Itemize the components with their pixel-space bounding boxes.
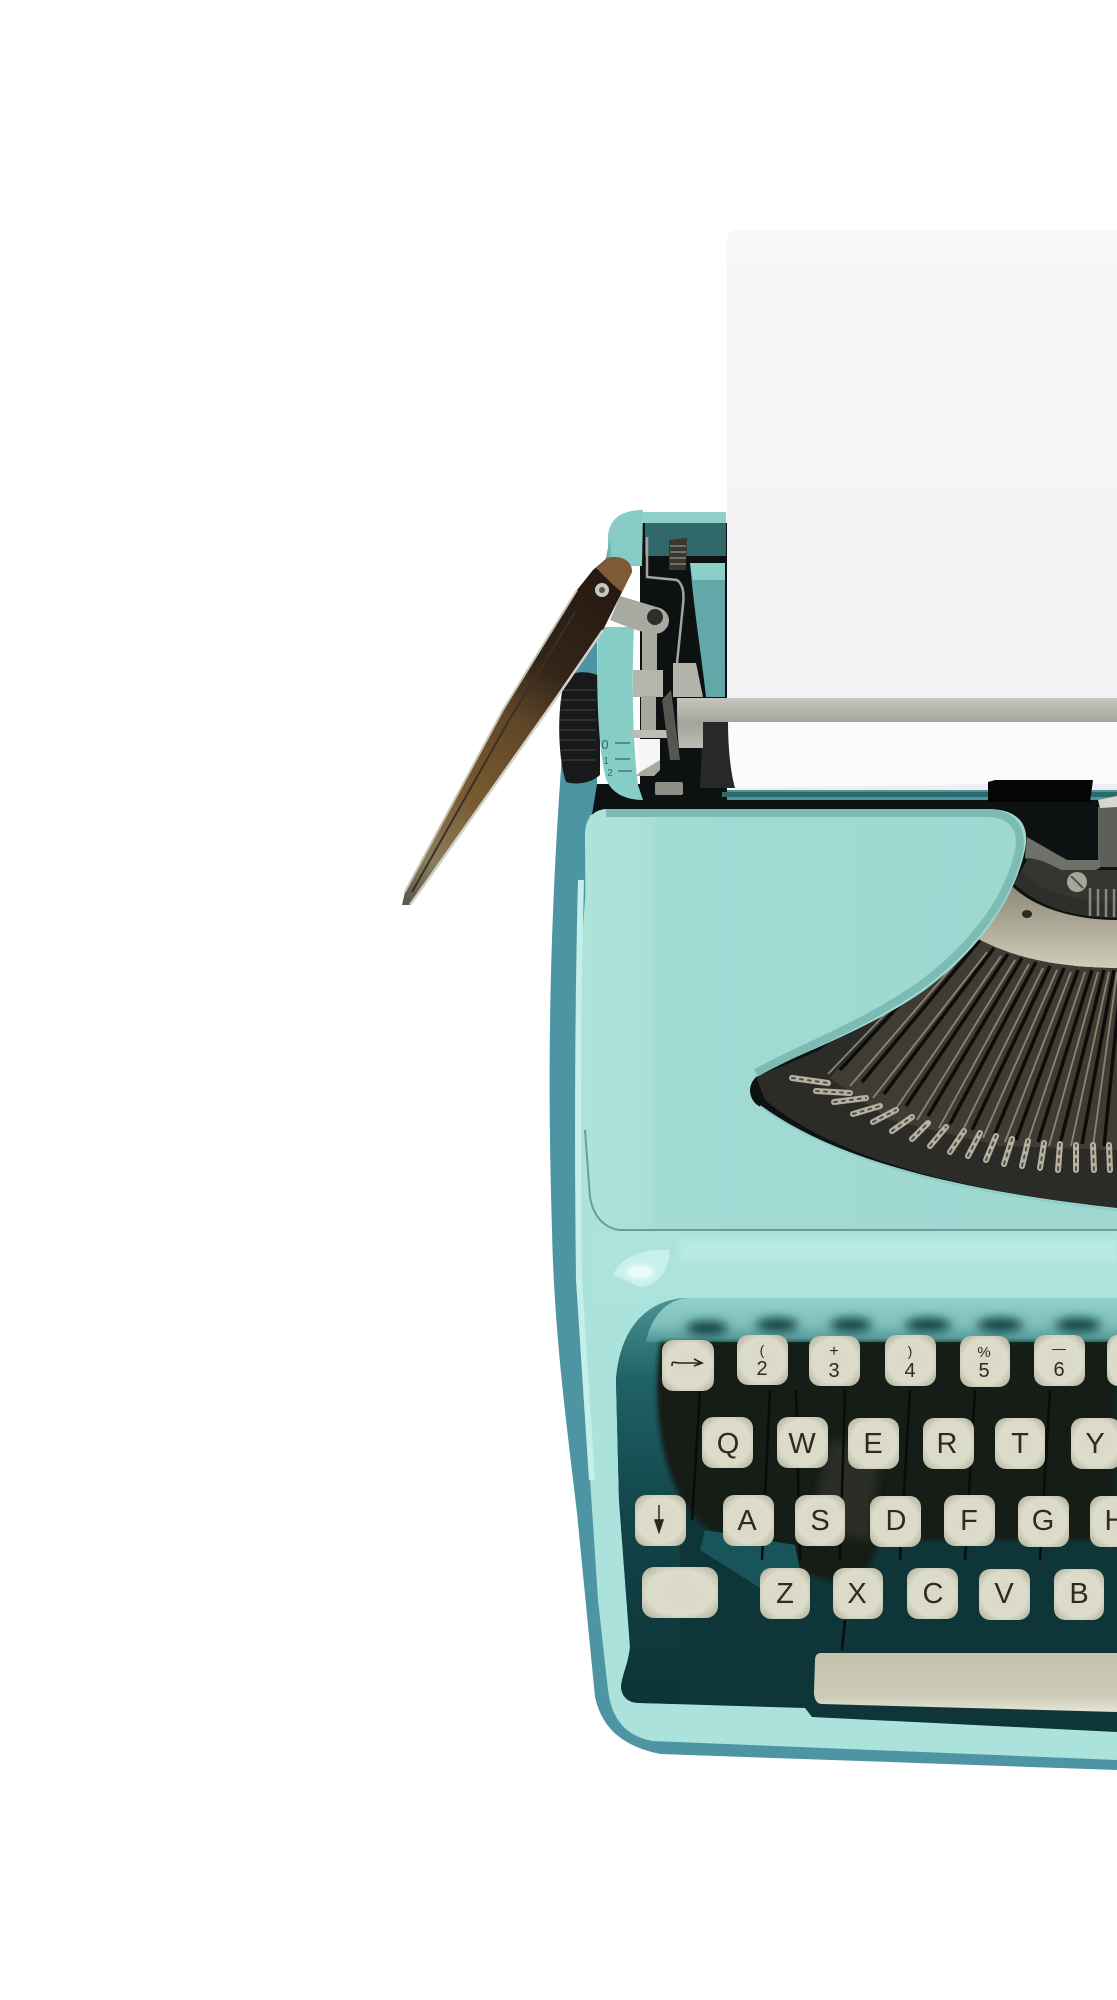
keyboard well [616, 1298, 1117, 1732]
keys: QWERTY row: Q [717, 1428, 739, 1460]
keys: ZXCV row: C [923, 1578, 943, 1610]
rubber type basket [756, 930, 1117, 1208]
keys: ASDF row: F [960, 1505, 978, 1537]
keys: ZXCV row: V [994, 1578, 1014, 1610]
keys: QWERTY row [702, 1417, 1117, 1469]
paper lower section [727, 722, 1117, 788]
line spacing dial numbers: 0 [601, 737, 609, 752]
carriage mechanism [632, 537, 703, 795]
type basket ring [963, 887, 1117, 968]
keys: QWERTY row: R [937, 1428, 957, 1460]
keys: QWERTY row: T [1011, 1428, 1029, 1460]
keys: number row: % [977, 1344, 991, 1361]
keys: number row: 2 [756, 1358, 768, 1380]
dark interior behind the cover [592, 523, 1117, 1210]
keys: number row: 3 [828, 1360, 840, 1382]
line spacing dial numbers: 2 [607, 768, 613, 779]
keys: ASDF row: D [886, 1505, 906, 1537]
keys: ASDF row: G [1032, 1505, 1054, 1537]
lever bracket [610, 596, 669, 634]
line spacing dial numbers: 1 [603, 756, 609, 767]
keys: QWERTY row: Y [1085, 1428, 1105, 1460]
keys: number row: — [1052, 1340, 1066, 1356]
keys: number row: + [829, 1343, 839, 1360]
typebars fan [828, 930, 1117, 1150]
keys: number row: 6 [1053, 1359, 1065, 1381]
keys: QWERTY row: E [863, 1428, 883, 1460]
type slugs [792, 1078, 1110, 1170]
keys: ZXCV row: X [847, 1578, 867, 1610]
keys: number row: ) [908, 1343, 912, 1359]
type mechanism top: bracket and plate [988, 780, 1117, 918]
front panel highlights [592, 1232, 1117, 1298]
keys: ZXCV row: Z [776, 1578, 794, 1610]
keys: ZXCV row [642, 1567, 1104, 1620]
keys: number row: ( [760, 1342, 765, 1358]
line spacing dial numbers [601, 737, 632, 779]
keys: QWERTY row: W [788, 1428, 816, 1460]
typewriter body shell [550, 640, 1117, 1770]
carriage return lever [402, 557, 632, 905]
paper sheet [727, 230, 1117, 790]
carriage knob [559, 672, 600, 784]
key stem shadows [686, 1318, 1101, 1335]
key lever mechanism [657, 1342, 1117, 1650]
keys: ASDF row: A [737, 1505, 757, 1537]
paper bail bar [677, 698, 1117, 748]
keys: ZXCV row: B [1069, 1578, 1089, 1610]
keys: number row: 5 [978, 1360, 990, 1382]
keys: number row [662, 1335, 1117, 1391]
keys: number row: 4 [904, 1360, 916, 1382]
keys: ASDF row [635, 1495, 1117, 1547]
top cover panel [585, 809, 1117, 1230]
platen roller [700, 722, 735, 788]
carriage end caps [597, 510, 726, 800]
keys: ASDF row: S [810, 1505, 830, 1537]
space bar [814, 1653, 1117, 1712]
